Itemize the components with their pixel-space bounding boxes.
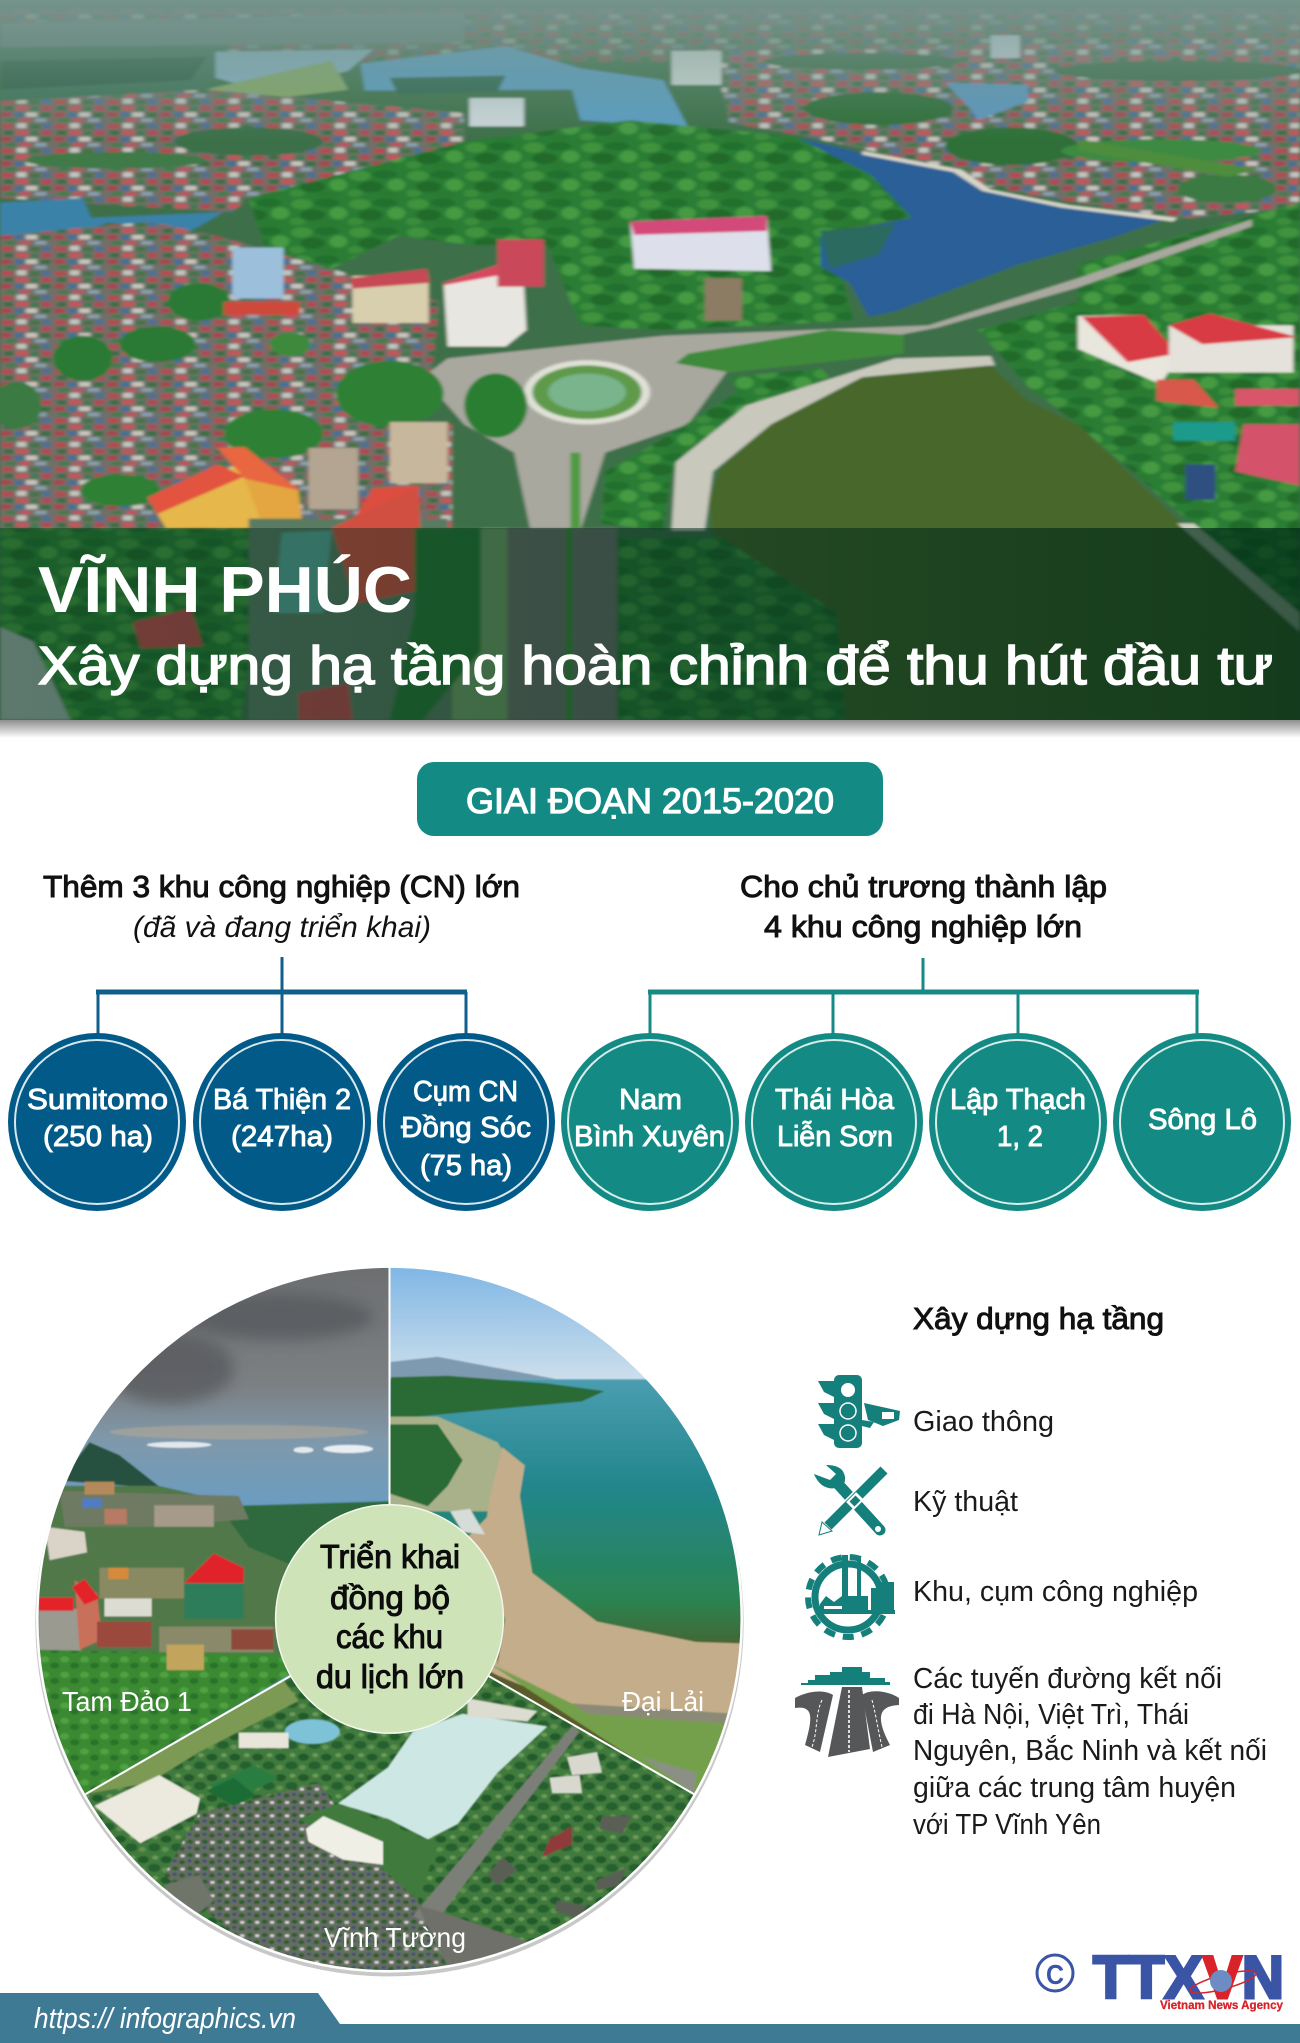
circle: Bá Thiện 2 [193, 1033, 371, 1211]
circle: Lập Thạch 1, 2: 1, 2 [997, 1121, 1043, 1153]
circle: Cụm CN Đồng Sóc: Đồng Sóc [401, 1112, 531, 1144]
logo: TTXVN Vietnam News Agency: Vietnam News Agency [1160, 1998, 1283, 2012]
period badge: GIAI ĐOẠN 2015-2020 [466, 782, 834, 821]
text: connecting roads: giữa các trung tâm huyện [913, 1772, 1236, 1804]
circle: Sumitomo: (250 ha) [43, 1121, 153, 1153]
circle: Sông Lô: Sông Lô [1148, 1104, 1257, 1136]
period badge [417, 762, 883, 836]
copyright mark [1037, 1955, 1073, 1991]
right group heading [740, 869, 1107, 944]
circle: Thái Hòa Liễn Sơn: Thái Hòa [775, 1084, 895, 1116]
circle: Thái Hòa Liễn Sơn [745, 1033, 923, 1211]
left group heading: (đã và đang triển khai) [133, 911, 431, 944]
photo slice: Đại Lải [390, 1268, 740, 1794]
text: connecting roads: đi Hà Nội, Việt Trì, Thái [913, 1699, 1189, 1731]
icon: gear factory [808, 1555, 895, 1637]
text: connecting roads [913, 1663, 1267, 1841]
right group heading: Cho chủ trương thành lập [740, 869, 1107, 904]
right connector tree [648, 958, 1199, 1034]
circle: Sumitomo [8, 1033, 186, 1211]
circle: Sông Lô [1113, 1033, 1291, 1211]
circle: Cụm CN Đồng Sóc: (75 ha) [420, 1150, 512, 1182]
label: Giao thông: Giao thông [913, 1406, 1054, 1438]
circle: Lập Thạch 1, 2: Lập Thạch [950, 1084, 1086, 1116]
circle: Cụm CN Đồng Sóc [377, 1033, 555, 1211]
footer bar with URL: https:// infographics.vn [34, 2003, 296, 2035]
circle: Nam Bình Xuyên [561, 1033, 739, 1211]
text: connecting roads: Nguyên, Bắc Ninh và kết nối [913, 1734, 1267, 1767]
title [38, 553, 1273, 696]
title: Xây dựng hạ tầng hoàn chỉnh để thu hút đầu tư [38, 636, 1273, 696]
left connector tree [96, 957, 467, 1034]
circle: Thái Hòa Liễn Sơn: Liễn Sơn [777, 1120, 893, 1153]
copyright mark: C [1046, 1959, 1064, 1990]
circle: Cụm CN Đồng Sóc: Cụm CN [413, 1076, 518, 1108]
icon: roads and skyline [795, 1667, 899, 1757]
center text [316, 1538, 464, 1695]
footer bar with URL [0, 1993, 1300, 2043]
circle: Bá Thiện 2: (247ha) [231, 1121, 333, 1153]
icon: traffic light and camera [818, 1375, 900, 1448]
text: connecting roads: với TP Vĩnh Yên [913, 1809, 1101, 1841]
center text: du lịch lớn [316, 1658, 464, 1695]
left group heading [43, 869, 520, 944]
circle: Nam Bình Xuyên: Bình Xuyên [574, 1121, 725, 1153]
header aerial photo of Vinh Phuc city [0, 0, 1300, 720]
infrastructure heading: Xây dựng hạ tầng [913, 1301, 1164, 1336]
text: connecting roads: Các tuyến đường kết nối [913, 1663, 1222, 1695]
center text: đồng bộ [330, 1579, 450, 1616]
shadow under header photo [0, 720, 1300, 738]
center circle [276, 1505, 503, 1733]
circle: Bá Thiện 2: Bá Thiện 2 [213, 1084, 351, 1116]
center text: Triển khai [320, 1538, 460, 1575]
circle: Lập Thạch 1, 2 [929, 1033, 1107, 1211]
title band overlay [0, 528, 1300, 720]
pie dividers [86, 1267, 694, 1794]
label: Đại Lải: Đại Lải [622, 1686, 704, 1717]
tourism pie of three photos [35, 1268, 744, 1976]
photo slice: Tam Đảo [38, 1268, 388, 1794]
circle: Sumitomo: Sumitomo [27, 1084, 168, 1116]
center text: các khu [336, 1618, 443, 1655]
label: Kỹ thuật: Kỹ thuật [913, 1486, 1018, 1518]
logo: TTXVN Vietnam News Agency: TTXVN [1093, 1944, 1284, 2011]
label: Tam Đảo 1: Tam Đảo 1 [62, 1686, 192, 1717]
icon: wrench and pencil [814, 1465, 884, 1535]
right group heading: 4 khu công nghiệp lớn [764, 909, 1082, 944]
label: Khu, cụm công nghiệp: Khu, cụm công nghiệp [913, 1576, 1198, 1608]
photo slice: Vĩnh Tường [86, 1677, 693, 1970]
left group heading: Thêm 3 khu công nghiệp (CN) lớn [43, 869, 520, 904]
label: Vĩnh Tường: Vĩnh Tường [324, 1922, 466, 1953]
circle: Nam Bình Xuyên: Nam [619, 1084, 682, 1116]
title: VĨNH PHÚC [38, 553, 412, 626]
